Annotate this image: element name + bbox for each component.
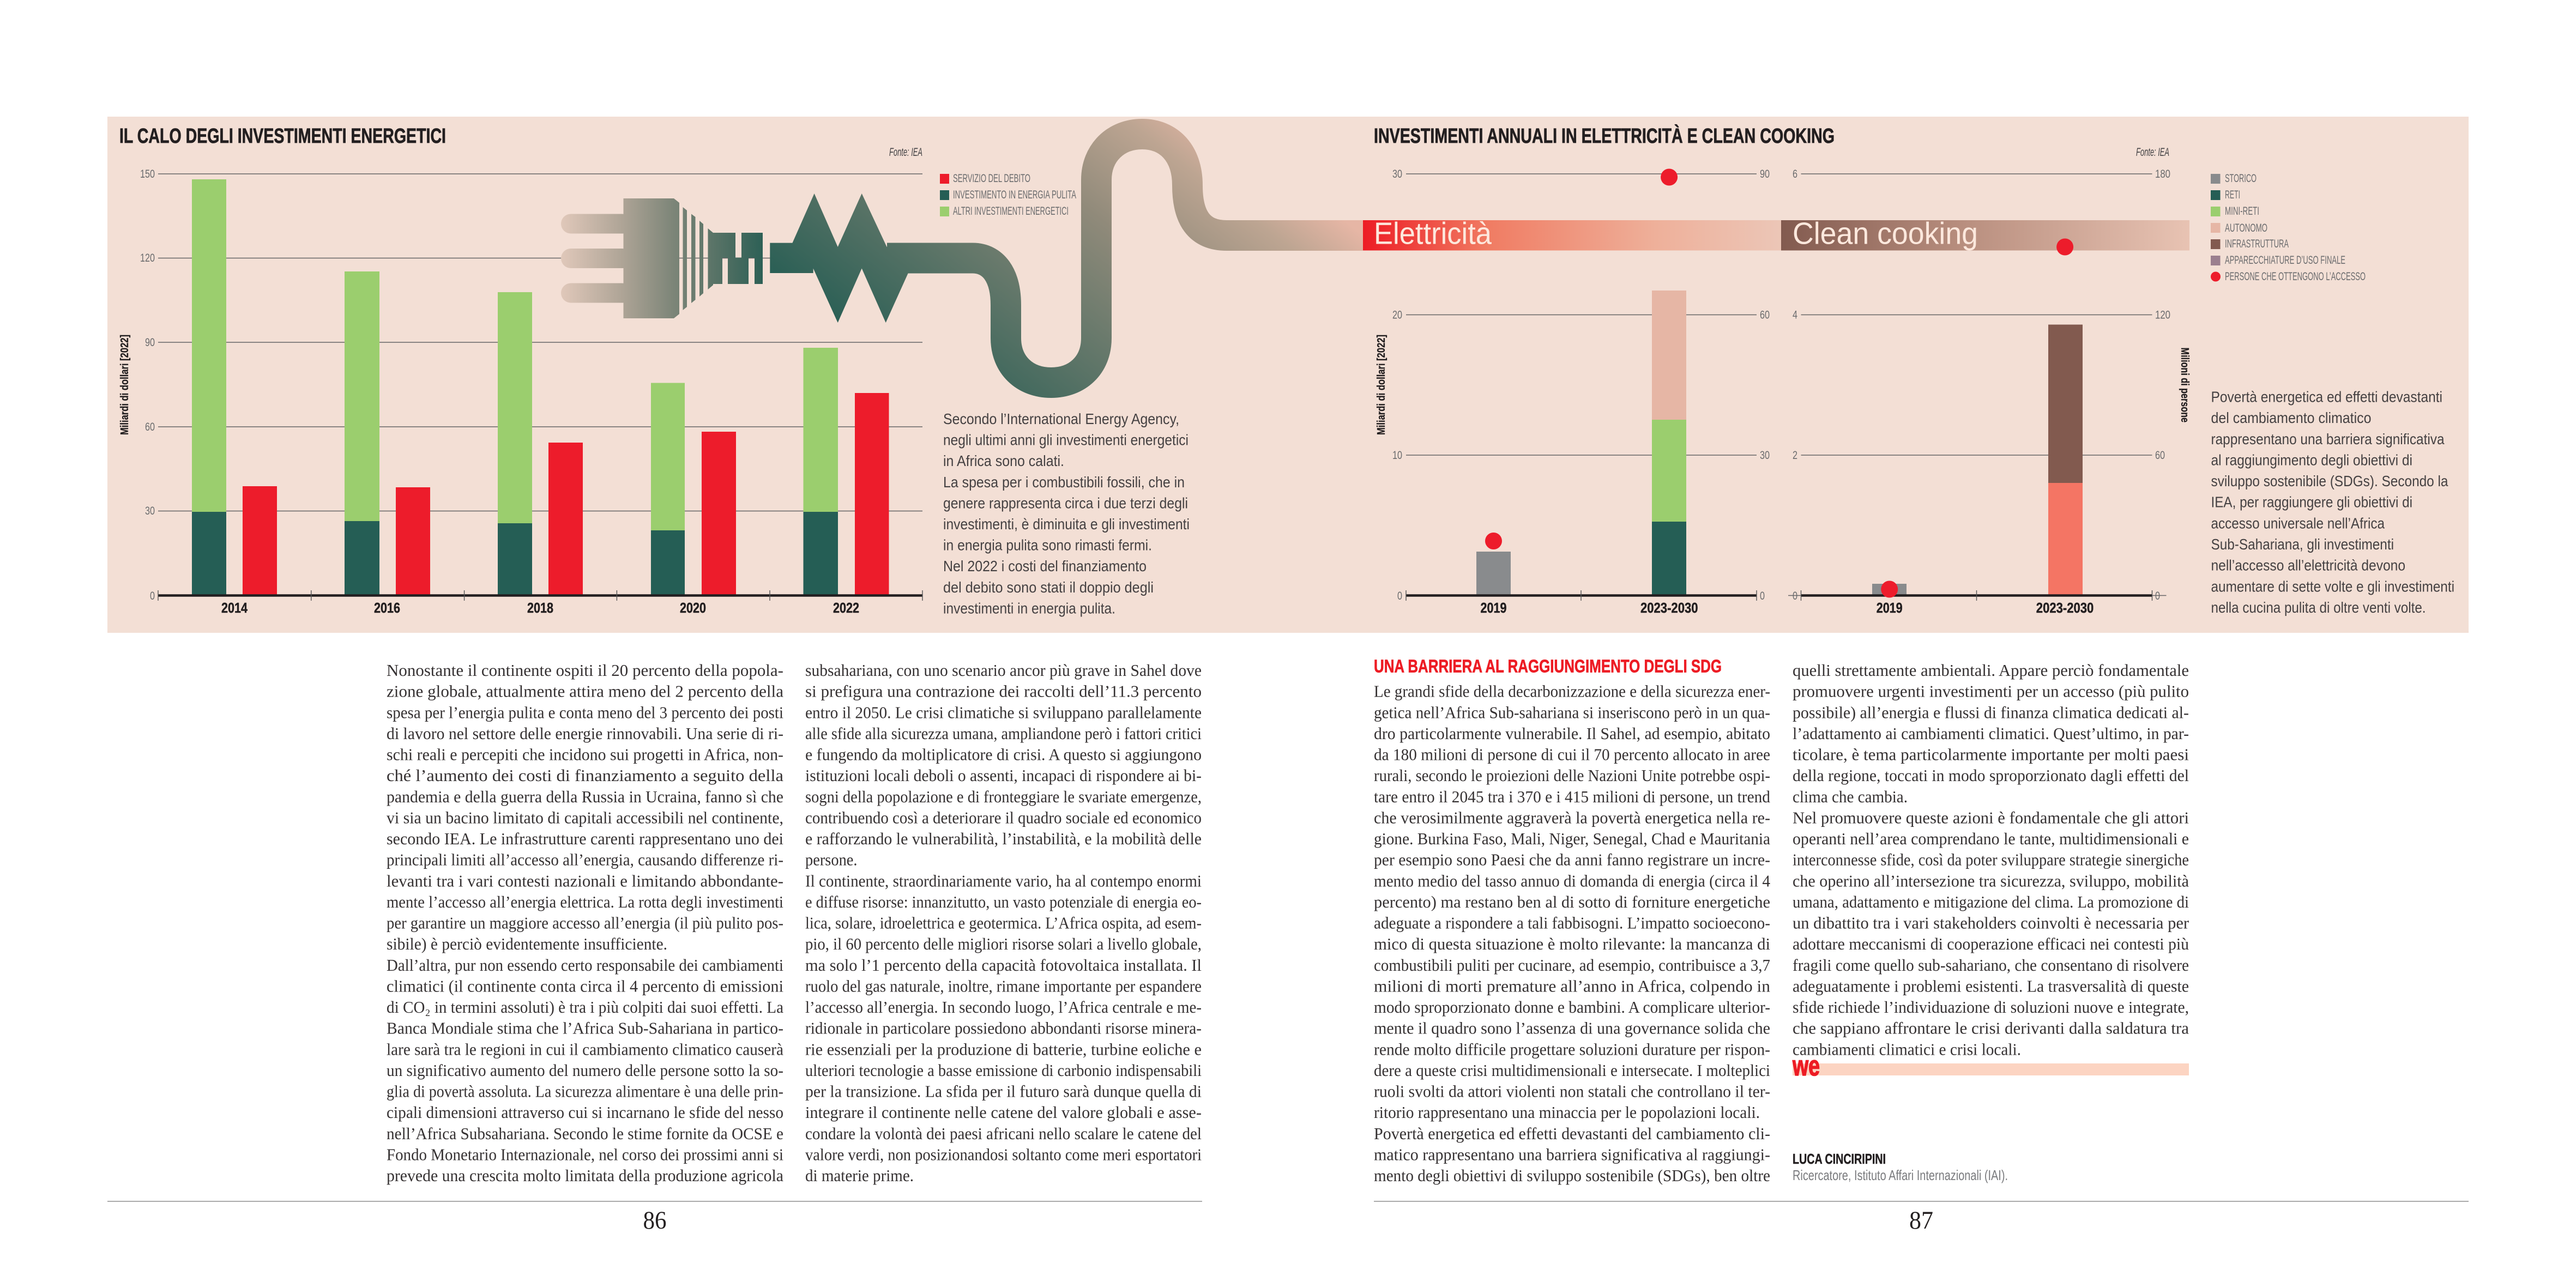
article column 4: promuovere urgenti investimenti per un accesso (più pulito: [1793, 682, 2189, 701]
article column 1: principali limiti all’accesso all’energia, causando differenze ri-: [387, 850, 783, 869]
article column 1: spesa per l’energia pulita e conta meno del 3 percento dei posti: [387, 703, 783, 722]
article column 3: [1374, 682, 1770, 1185]
article column 4: possibile) all’energia e flussi di finanza climatica dedicati al-: [1793, 703, 2189, 722]
text block: povertà energetica: sviluppo sostenibile (SDGs). Secondo la: [2211, 473, 2448, 489]
band: elettricità: Elettricità: [1374, 216, 1492, 251]
article column 1: sibile) è perciò evidentemente insufficiente.: [387, 934, 667, 953]
gridlines and axis labels: 20: [1392, 309, 1402, 322]
article column 1: di lavoro nel settore delle energie rinnovabili. Una serie di ri-: [387, 724, 783, 743]
article column 4: interconnesse sfide, così da poter sviluppare strategie sinergiche: [1793, 850, 2189, 869]
article column 1: levanti tra i vari contesti nazionali e limitando abbondante-: [387, 871, 783, 890]
article column 2: [805, 661, 1202, 1185]
article column 2: persone.: [805, 850, 857, 869]
gridlines and axis labels: [140, 168, 922, 602]
year labels: [1877, 601, 2094, 616]
gridlines and axis labels: 2: [1793, 449, 1797, 462]
gridlines and axis labels: 30: [145, 505, 155, 517]
page number 87: 87: [1909, 1206, 1933, 1235]
article column 3: Povertà energetica ed effetti devastanti del cambiamento cli-: [1374, 1124, 1770, 1143]
year labels: 2018: [527, 601, 553, 616]
article column 1: Nonostante il continente ospiti il 20 percento della popola-: [387, 661, 783, 680]
legend: left chart: INVESTIMENTO IN ENERGIA PULITA: [953, 188, 1076, 201]
text block: povertà energetica: IEA, per raggiungere gli obiettivi di: [2211, 494, 2412, 511]
x axis ticks: [1801, 590, 2152, 601]
article column 2: entro il 2050. Le crisi climatiche si sviluppano parallelamente: [805, 703, 1202, 722]
footer rule right page: [1374, 1201, 2469, 1202]
gridlines and axis labels: 60: [145, 421, 155, 433]
article column 2: e diffuse risorse: innanzitutto, un vasto potenziale di energia eo-: [805, 892, 1202, 911]
gridlines and axis labels: 120: [140, 252, 155, 264]
year labels: 2019: [1877, 601, 1903, 616]
article column 2: ruolo del gas naturale, inoltre, rimane importante per espandere: [805, 977, 1202, 995]
article column 4: l’adattamento ai cambiamenti climatici. Quest’ultimo, in par-: [1793, 724, 2189, 743]
article column 3: mico di questa situazione è molto rilevante: la mancanza di: [1374, 934, 1770, 953]
x axis: [1406, 594, 1757, 597]
text block: povertà energetica: Povertà energetica ed effetti devastanti: [2211, 388, 2442, 406]
article column 1: Banca Mondiale stima che l’Africa Sub-Sahariana in partico-: [387, 1019, 783, 1038]
band: clean cooking: [1781, 216, 2189, 251]
article column 4: sfide richiede l’individuazione di soluzioni nuove e integrate,: [1793, 997, 2189, 1017]
article column 2: per la transizione. La sfida per il futuro sarà dunque quella di: [805, 1082, 1202, 1101]
text block: povertà energetica: nell’accesso all’elettricità devono: [2211, 557, 2405, 574]
article column 2: istituzioni locali deboli o assenti, incapaci di rispondere ai bi-: [805, 766, 1202, 785]
article column 1: cipali dimensioni attraverso cui si incarnano le sfide del nesso: [387, 1103, 783, 1122]
text block: povertà energetica: del cambiamento climatico: [2211, 409, 2372, 426]
article column 3: gione. Burkina Faso, Mali, Niger, Senegal, Chad e Mauritania: [1374, 829, 1770, 848]
legend: left chart: ALTRI INVESTIMENTI ENERGETICI: [953, 204, 1069, 217]
article column 3: che verosimilmente aggraverà la povertà energetica nella re-: [1374, 808, 1770, 827]
article column 2: e fungendo da moltiplicatore di crisi. A questo si aggiungono: [805, 745, 1202, 764]
text block: international energy agency: investimenti in energia pulita.: [943, 600, 1115, 616]
year labels: 2020: [680, 601, 706, 616]
article column 2: e rafforzando le vulnerabilità, l’instabilità, e la mobilità delle: [805, 829, 1202, 848]
article column 3: dere a queste crisi multidimensionali e intersecate. I molteplici: [1374, 1061, 1770, 1080]
text block: international energy agency: in Africa sono calati.: [943, 452, 1064, 469]
article column 4: che operino all’intersezione tra sicurezza, sviluppo, mobilità: [1793, 871, 2189, 890]
gridlines and axis labels: 4: [1793, 309, 1797, 322]
y axis title: Milioni di persone: [2179, 348, 2191, 422]
x axis ticks: [1406, 590, 1757, 601]
article column 1: climatici (il continente conta circa il 4 percento di emissioni: [387, 977, 783, 995]
footer rule left page: [107, 1201, 1202, 1202]
author name: LUCA CINCIRIPINI: [1793, 1151, 1886, 1167]
article column 3: tare entro il 2045 tra i 370 e i 415 milioni di persone, un trend: [1374, 787, 1770, 806]
article column 2: contribuendo così a deteriorare il quadro sociale ed economico: [805, 808, 1202, 827]
article column 4: ticolare, è tema particolarmente importante per molti paesi: [1793, 745, 2189, 764]
people dot 2019: [1881, 581, 1898, 597]
article column 2: Il continente, straordinariamente vario, ha al contempo enormi: [805, 871, 1202, 890]
x axis ticks: [158, 590, 922, 601]
article column 2: l’accesso all’energia. In secondo luogo, l’Africa centrale e me-: [805, 997, 1202, 1017]
legend: right chart: PERSONE CHE OTTENGONO L’ACCESSO: [2225, 270, 2366, 283]
article column 2: sogni della popolazione e di fronteggiare le svariate emergenze,: [805, 787, 1202, 806]
y axis title: Miliardi di dollari [2022]: [1376, 335, 1387, 435]
author role: Ricercatore, Istituto Affari Internazionali (IAI).: [1793, 1167, 2008, 1183]
section heading: una barriera: UNA BARRIERA AL RAGGIUNGIMENTO DEGLI SDG: [1374, 656, 1722, 676]
article column 1: vi sia un bacino limitato di capitali accessibili nel continente,: [387, 808, 783, 827]
icon: zigzag lightning connector: [770, 193, 908, 323]
article column 2: valore verdi, non posizionandosi soltanto come meri esportatori: [805, 1145, 1202, 1164]
people dot 2023-2030: [1661, 169, 1678, 185]
gridlines and axis labels: 0: [1397, 590, 1402, 602]
article column 3: rende molto difficile progettare soluzioni durature per rispon-: [1374, 1039, 1770, 1059]
text block: povertà energetica: aumentare di sette volte e gli investimenti: [2211, 578, 2454, 595]
gridlines and axis labels: 0: [1793, 590, 1797, 602]
article column 3: mento medio del tasso annuo di domanda di energia (circa il 4: [1374, 871, 1770, 890]
article column 2: ulteriori tecnologie a basse emissione di carbonio indispensabili: [805, 1061, 1202, 1080]
article column 3: adeguate a rispondere a tali fabbisogni. L’impatto socioecono-: [1374, 914, 1770, 933]
article column 2: integrare il continente nelle catene del valore globali e asse-: [805, 1103, 1202, 1122]
heading: investimenti annuali: INVESTIMENTI ANNUALI IN ELETTRICITÀ E CLEAN COOKING: [1374, 124, 1835, 148]
article column 1: nell’Africa Subsahariana. Secondo le stime fornite da OCSE e: [387, 1124, 783, 1143]
text block: international energy agency: Secondo l’International Energy Agency,: [943, 410, 1179, 427]
article column 2: condare la volontà dei paesi africani nello scalare le catene del: [805, 1124, 1202, 1143]
article column 4: clima che cambia.: [1793, 787, 1908, 806]
text block: international energy agency: del debito sono stati il doppio degli: [943, 579, 1154, 596]
article column 1: lare sarà tra le regioni in cui il cambiamento climatico causerà: [387, 1039, 783, 1059]
band: clean cooking: Clean cooking: [1793, 216, 1978, 251]
article column 3: combustibili puliti per cucinare, ad esempio, contribuisce a 3,7: [1374, 956, 1770, 975]
gridlines and axis labels: 30: [1760, 449, 1770, 462]
article column 4: della regione, toccati in modo sproporzionato dagli effetti del: [1793, 766, 2189, 785]
gridlines and axis labels: 30: [1392, 168, 1402, 180]
gridlines and axis labels: 0: [1760, 590, 1765, 602]
text block: povertà energetica: nella cucina pulita di oltre venti volte.: [2211, 599, 2426, 616]
end mark: we bar: we: [1792, 1050, 1820, 1082]
article column 3: per esempio sono Paesi che da anni fanno registrare un incre-: [1374, 850, 1770, 869]
text block: international energy agency: investimenti, è diminuita e gli investimenti: [943, 516, 1190, 533]
x axis: [1801, 594, 2152, 597]
bars 2014: [192, 179, 277, 595]
article column 1: per garantire un maggiore accesso all’energia (il più pulito pos-: [387, 914, 783, 933]
bars 2022: [804, 348, 889, 595]
article column 3: dro particolarmente vulnerabile. Il Sahel, ad esempio, abitato: [1374, 724, 1770, 743]
article column 4: operanti nell’area comprendano le tante, multidimensionali e: [1793, 829, 2189, 848]
article column 1: Dall’altra, pur non essendo certo responsabile dei cambiamenti: [387, 956, 783, 975]
gridlines and axis labels: [1392, 168, 1770, 602]
article column 3: ruoli svolti da attori violenti non statali che controllano il ter-: [1374, 1082, 1770, 1101]
text block: povertà energetica: Sub-Sahariana, gli investimenti: [2211, 536, 2394, 553]
text block: international energy agency: La spesa per i combustibili fossili, che in: [943, 474, 1185, 491]
article column 1: Fondo Monetario Internazionale, nel corso dei prossimi anni si: [387, 1145, 783, 1164]
article column 2: ma solo l’1 percento della capacità fotovoltaica installata. Il: [805, 956, 1202, 975]
article column 2: lica, solare, idroelettrica e geotermica. L’Africa ospita, ad esem-: [805, 914, 1202, 933]
source note: right chart: Fonte: IEA: [2136, 146, 2169, 159]
bars 2020: [651, 383, 736, 595]
article column 3: da 180 milioni di persone di cui il 70 percento allocato in aree: [1374, 745, 1770, 764]
article column 1: mente l’accesso all’energia elettrica. La rotta degli investimenti: [387, 892, 783, 911]
article column 4: Nel promuovere queste azioni è fondamentale che gli attori: [1793, 808, 2189, 827]
cable connecting the plug to the band: [887, 134, 1363, 383]
gridlines and axis labels: 90: [1760, 168, 1770, 180]
article column 4: adeguatamente i problemi esistenti. La trasversalità di queste: [1793, 977, 2189, 995]
article column 4: fragili come quello sub-sahariano, che consentano di risolvere: [1793, 956, 2189, 975]
article column 4: adottare meccanismi di cooperazione efficaci nei contesti più: [1793, 934, 2189, 953]
gridlines and axis labels: 10: [1392, 449, 1402, 462]
heading: il calo degli investimenti energetici: IL CALO DEGLI INVESTIMENTI ENERGETICI: [119, 125, 446, 148]
legend: right chart: AUTONOMO: [2225, 221, 2267, 234]
text block: international energy agency: [943, 410, 1190, 616]
article column 3: Le grandi sfide della decarbonizzazione e della sicurezza ener-: [1374, 682, 1770, 701]
gridlines and axis labels: 90: [145, 336, 155, 349]
legend: right chart: RETI: [2225, 188, 2240, 201]
y axis title: Miliardi di dollari [2022]: [119, 335, 131, 435]
gridlines and axis labels: 150: [140, 168, 155, 180]
article column 4: quelli strettamente ambientali. Appare perciò fondamentale: [1793, 661, 2189, 680]
gridlines and axis labels: 180: [2155, 168, 2170, 180]
text block: international energy agency: genere rappresenta circa i due terzi degli: [943, 494, 1188, 511]
chart: investimenti energetici 2014-2022: [119, 168, 922, 616]
article column 3: ritorio rappresentano una minaccia per le popolazioni locali.: [1374, 1103, 1760, 1122]
legend: right chart: MINI-RETI: [2225, 204, 2259, 217]
article column 3: getica nell’Africa Sub-sahariana si inseriscono però in un qua-: [1374, 703, 1770, 722]
year labels: 2014: [221, 601, 248, 616]
article column 1: ché l’aumento dei costi di finanziamento a seguito della: [387, 766, 783, 785]
legend: right chart: STORICO: [2225, 172, 2257, 185]
text block: international energy agency: Nel 2022 i costi del finanziamento: [943, 558, 1147, 575]
article column 3: mento degli obiettivi di sviluppo sostenibile (SDGs), ben oltre: [1374, 1166, 1770, 1185]
icon: electric plug: [561, 198, 763, 318]
bar 2019: [1872, 584, 1907, 595]
article column 2: ridionale in particolare possiedono abbondanti risorse minera-: [805, 1019, 1202, 1038]
gridlines and axis labels: [1788, 168, 2170, 602]
chart: clean cooking: [1788, 168, 2191, 616]
article column 4: [1793, 661, 2189, 1059]
article column 1: schi reali e percepiti che incidono sui progetti in Africa, non-: [387, 745, 783, 764]
gridlines and axis labels: 6: [1793, 168, 1797, 180]
article column 1: pandemia e della guerra della Russia in Ucraina, fanno sì che: [387, 787, 783, 806]
article column 4: umana, adattamento e mitigazione del clima. La promozione di: [1793, 892, 2189, 911]
year labels: 2019: [1481, 601, 1507, 616]
year labels: [221, 601, 859, 616]
article column 1: secondo IEA. Le infrastrutture carenti rappresentano uno dei: [387, 829, 783, 848]
people dot 2023-2030: [2056, 239, 2073, 255]
legend: right chart: APPARECCHIATURE D’USO FINALE: [2225, 253, 2345, 267]
article column 3: milioni di morti premature all’anno in Africa, colpendo in: [1374, 977, 1770, 995]
stacked bar 2023-2030: [2048, 325, 2083, 595]
year labels: 2023-2030: [2036, 601, 2094, 616]
article column 1: glia di povertà assoluta. La sicurezza alimentare è una delle prin-: [387, 1082, 783, 1101]
article column 2: alle sfide alla sicurezza umana, ampliandone però i fattori critici: [805, 724, 1202, 743]
article column 3: modo sproporzionato donne e bambini. A complicare ulterior-: [1374, 997, 1770, 1017]
article column 2: si prefigura una contrazione dei raccolti dell’11.3 percento: [805, 682, 1202, 701]
article column 2: subsahariana, con uno scenario ancor più grave in Sahel dove: [805, 661, 1202, 680]
article column 4: che sappiano affrontare le crisi derivanti dalla saldatura tra: [1793, 1019, 2189, 1038]
year labels: 2023-2030: [1640, 601, 1698, 616]
article column 2: rie essenziali per la produzione di batterie, turbine eoliche e: [805, 1039, 1202, 1059]
gridlines and axis labels: 0: [150, 590, 155, 602]
stacked bar 2023-2030: [1652, 291, 1686, 595]
article column 1: zione globale, attualmente attira meno del 2 percento della: [387, 682, 783, 701]
panel: infographic background: [107, 117, 2469, 633]
legend: left chart: [940, 172, 1076, 217]
bars 2018: [498, 292, 583, 595]
article column 1: [387, 661, 783, 1185]
page number 86: 86: [643, 1206, 666, 1235]
text block: povertà energetica: accesso universale nell’Africa: [2211, 515, 2385, 531]
year labels: [1481, 601, 1698, 616]
gridlines and axis labels: 0: [2155, 590, 2160, 602]
article column 4: cambiamenti climatici e crisi locali.: [1793, 1039, 2021, 1059]
gridlines and axis labels: 120: [2155, 309, 2170, 322]
article column 1: di CO₂ in termini assoluti) è tra i più colpiti dai suoi effetti. La: [387, 997, 783, 1017]
text block: povertà energetica: [2211, 388, 2454, 616]
band: elettricità: [1363, 216, 1781, 251]
x axis: [158, 594, 922, 597]
article column 1: prevede una crescita molto limitata della produzione agricola: [387, 1166, 783, 1185]
article column 3: mente il quadro sono l’assenza di una governance solida che: [1374, 1019, 1770, 1038]
text block: international energy agency: negli ultimi anni gli investimenti energetici: [943, 432, 1189, 449]
article column 2: pio, il 60 percento delle migliori risorse solari a livello globale,: [805, 934, 1202, 953]
end mark: we bar: [1792, 1050, 2189, 1082]
article column 3: matico rappresentano una barriera significativa al raggiungi-: [1374, 1145, 1770, 1164]
text block: povertà energetica: rappresentano una barriera significativa: [2211, 431, 2445, 448]
gridlines and axis labels: 60: [1760, 309, 1770, 322]
legend: right chart: [2211, 172, 2366, 283]
gridlines and axis labels: 60: [2155, 449, 2165, 462]
year labels: 2022: [833, 601, 859, 616]
bars 2016: [345, 271, 430, 595]
article column 4: un dibattito tra i vari stakeholders coinvolti è necessaria per: [1793, 914, 2189, 933]
legend: left chart: SERVIZIO DEL DEBITO: [953, 172, 1030, 185]
people dot 2019: [1485, 533, 1502, 549]
article column 1: un significativo aumento del numero delle persone sotto la so-: [387, 1061, 783, 1080]
source note: left chart: Fonte: IEA: [889, 146, 922, 159]
article column 2: di materie prime.: [805, 1166, 914, 1185]
year labels: 2016: [374, 601, 400, 616]
article column 3: rurali, secondo le proiezioni delle Nazioni Unite potrebbe ospi-: [1374, 766, 1770, 785]
bar 2019: [1476, 552, 1511, 595]
article column 3: percento) ma restano ben al di sotto di forniture energetiche: [1374, 892, 1770, 911]
legend: right chart: INFRASTRUTTURA: [2225, 237, 2289, 250]
chart: elettricità: [1376, 168, 1770, 616]
text block: povertà energetica: al raggiungimento degli obiettivi di: [2211, 451, 2412, 468]
text block: international energy agency: in energia pulita sono rimasti fermi.: [943, 537, 1152, 554]
